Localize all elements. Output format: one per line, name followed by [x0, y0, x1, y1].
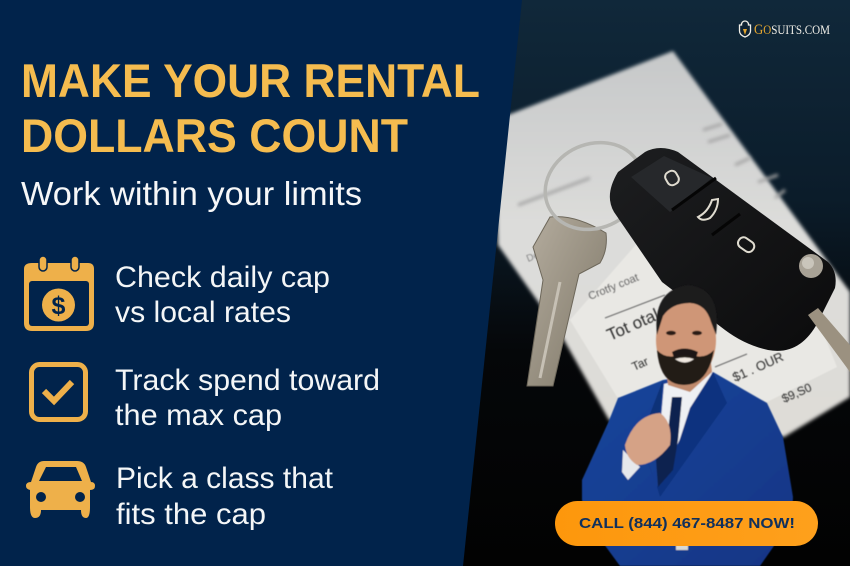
- icon: checkbox: [32, 364, 86, 420]
- photo: keys and receipt on dark table: [440, 0, 850, 566]
- navy left panel: [0, 0, 522, 566]
- receipt printed text: $9,S0: [780, 380, 814, 406]
- blurred receipt line items: [518, 124, 785, 205]
- watch: [676, 544, 688, 550]
- step 2 text: the max cap: [115, 399, 282, 432]
- receipt printed text: $1 . OUR: [730, 349, 786, 385]
- receipt printed text: Crotfy coat: [587, 272, 640, 303]
- title: [21, 54, 480, 162]
- icon: car: [26, 461, 95, 518]
- face: [656, 299, 716, 381]
- title: MAKE YOUR RENTAL: [21, 54, 480, 107]
- car key fob: [610, 148, 836, 351]
- fold-out key blade: [808, 308, 850, 372]
- receipt: rear sheet: [495, 51, 850, 437]
- receipt: front sheet: [570, 240, 837, 402]
- receipt printed text: Dealer total: [525, 235, 577, 265]
- key ring: [531, 127, 657, 245]
- right lapel: [657, 372, 727, 497]
- suit jacket: [582, 372, 793, 566]
- step 3 text: [116, 462, 334, 531]
- beard: [657, 350, 714, 385]
- call to action button: CALL (844) 467-8487 NOW!: [579, 515, 795, 532]
- receipt printed text: [525, 235, 814, 406]
- step 2 text: [115, 364, 380, 432]
- neck: [665, 355, 712, 392]
- eyes: [666, 331, 676, 335]
- left lapel: [640, 380, 663, 487]
- step 2 text: Track spend toward: [115, 364, 380, 397]
- step 1 text: [115, 261, 330, 329]
- icon: calendar with dollar: [24, 256, 94, 331]
- shirt: [660, 371, 713, 445]
- subtitle: Work within your limits: [21, 175, 362, 212]
- metal key: [527, 217, 606, 386]
- fob buttons: [663, 169, 756, 254]
- shirt cuff: [622, 450, 640, 480]
- receipt printed text: Tar: [630, 354, 650, 374]
- call to action button: [555, 501, 818, 546]
- receipt printed text: Tot otal: [604, 305, 662, 345]
- necktie: [656, 397, 682, 487]
- step 3 text: Pick a class that: [116, 462, 334, 495]
- logo: GoSuits.com: GOSUITS.COM: [754, 22, 830, 38]
- hair: [656, 285, 717, 335]
- step 1 text: Check daily cap: [115, 261, 330, 294]
- step 3 text: fits the cap: [116, 498, 266, 531]
- icon: calendar with dollar: $: [52, 292, 66, 320]
- title: DOLLARS COUNT: [21, 109, 408, 162]
- attorney portrait: [582, 285, 793, 566]
- hand: [625, 413, 671, 465]
- step 1 text: vs local rates: [115, 296, 291, 329]
